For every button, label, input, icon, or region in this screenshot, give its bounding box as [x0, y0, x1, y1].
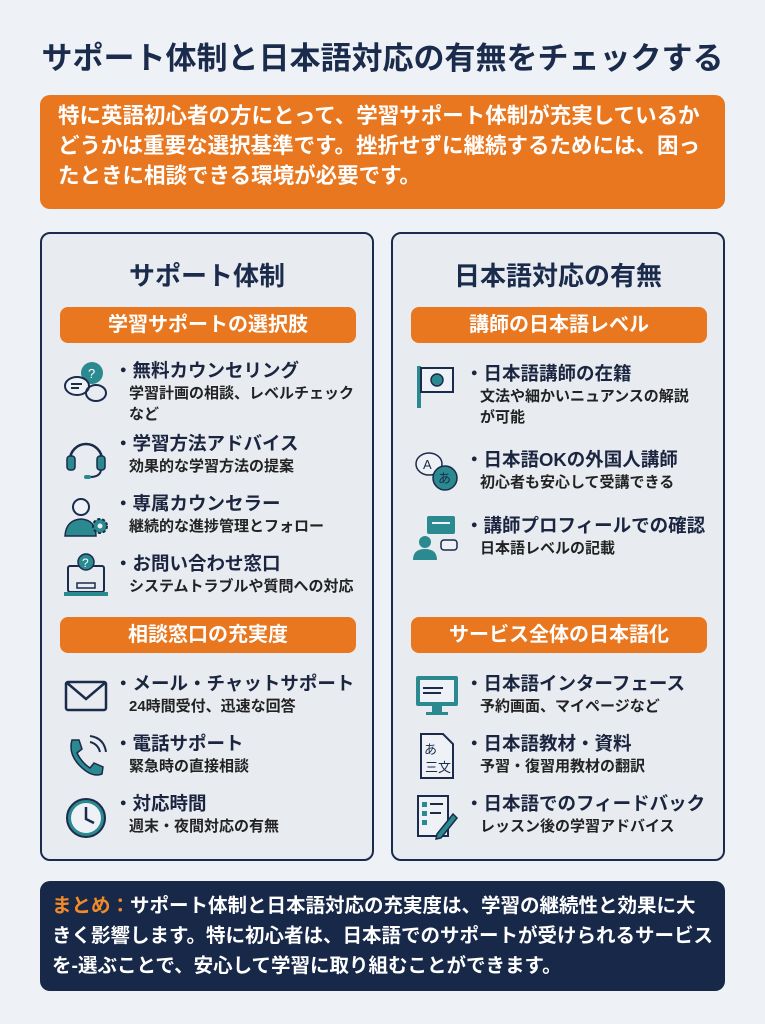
item: phone: 緊急時の直接相談 [129, 758, 249, 775]
panel heading: 日本語対応の有無 [454, 261, 662, 291]
item: foreign instructors: 初心者も安心して受講できる [480, 474, 674, 491]
panel: Japanese support [391, 232, 725, 861]
item: inquiry desk: システムトラブルや質問への対応 [129, 578, 354, 595]
item: hours: 週末・夜間対応の有無 [129, 818, 279, 835]
item: inquiry desk [64, 553, 354, 596]
intro callout: 特に英語初心者の方にとって、学習サポート体制が充実しているかどうかは重要な選択基準です。挫折せずに継続するためには、困ったときに相談できる環境が必要です。 [58, 104, 700, 188]
item: dedicated counselor: 継続的な進捗管理とフォロー [129, 518, 324, 535]
item: counseling [64, 360, 354, 423]
panel heading: サポート体制 [129, 261, 285, 291]
summary box [40, 881, 725, 991]
summary box: を-選ぶことで、安心して学習に取り組むことができます。 [52, 955, 562, 977]
item: profile check: 日本語レベルの記載 [480, 540, 615, 557]
item: study advice: ・学習方法アドバイス [114, 433, 298, 454]
item: interface: 予約画面、マイページなど [480, 698, 660, 715]
item: Japanese instructors: 文法や細かいニュアンスの解説 [480, 388, 689, 405]
item: foreign instructors [415, 449, 678, 491]
item: hours: ・対応時間 [114, 793, 207, 814]
intro callout [40, 95, 725, 209]
item: materials [420, 733, 645, 779]
item: mail chat: 24時間受付、迅速な回答 [129, 698, 296, 715]
item: mail chat: ・メール・チャットサポート [114, 673, 354, 694]
item: materials: あ [424, 739, 437, 758]
item: phone: ・電話サポート [114, 733, 244, 754]
item: foreign instructors: あ [438, 468, 451, 487]
item: study advice: 効果的な学習方法の提案 [129, 458, 294, 475]
item: phone [70, 733, 249, 776]
item: materials: 予習・復習用教材の翻訳 [480, 758, 645, 775]
item: Japanese instructors [417, 363, 689, 426]
section pill: service localization: サービス全体の日本語化 [449, 624, 669, 646]
section pill: consultation: 相談窓口の充実度 [128, 624, 288, 646]
item: counseling: など [129, 406, 159, 423]
item: materials: ・日本語教材・資料 [465, 733, 632, 754]
item: feedback: レッスン後の学習アドバイス [480, 818, 675, 835]
item: foreign instructors: ・日本語OKの外国人講師 [465, 449, 678, 470]
item: dedicated counselor: ・専属カウンセラー [114, 493, 281, 514]
item: interface: ・日本語インターフェース [465, 673, 685, 694]
section pill: learning support [60, 307, 356, 343]
summary box: まとめ：サポート体制と日本語対応の充実度は、学習の継続性と効果に大 [52, 895, 696, 917]
item: inquiry desk: ? [82, 556, 89, 570]
item: dedicated counselor [64, 493, 324, 537]
section pill: instructor level [411, 307, 707, 343]
item: inquiry desk: ・お問い合わせ窓口 [114, 553, 281, 574]
item: profile check [413, 515, 705, 560]
item: mail chat [64, 673, 354, 715]
item: study advice [66, 433, 298, 479]
section pill: service localization [411, 617, 707, 653]
item: Japanese instructors: ・日本語講師の在籍 [465, 363, 632, 384]
section pill: learning support: 学習サポートの選択肢 [108, 314, 308, 336]
item: hours [66, 793, 279, 838]
summary box: きく影響します。特に初心者は、日本語でのサポートが受けられるサービス [52, 925, 713, 947]
item: Japanese instructors: が可能 [480, 409, 525, 426]
item: interface [416, 673, 685, 715]
item: feedback [417, 793, 705, 840]
item: feedback: ・日本語でのフィードバック [465, 793, 705, 814]
item: profile check: ・講師プロフィールでの確認 [465, 515, 705, 536]
item: materials: 三文 [425, 757, 451, 776]
item: counseling: ・無料カウンセリング [114, 360, 299, 381]
section pill: instructor level: 講師の日本語レベル [469, 314, 649, 336]
item: counseling: ? [88, 366, 95, 381]
item: counseling: 学習計画の相談、レベルチェック [129, 385, 354, 402]
item: foreign instructors: A [423, 457, 432, 472]
panel: support system [40, 232, 374, 861]
section pill: consultation [60, 617, 356, 653]
title: サポート体制と日本語対応の有無をチェックする [42, 41, 724, 76]
